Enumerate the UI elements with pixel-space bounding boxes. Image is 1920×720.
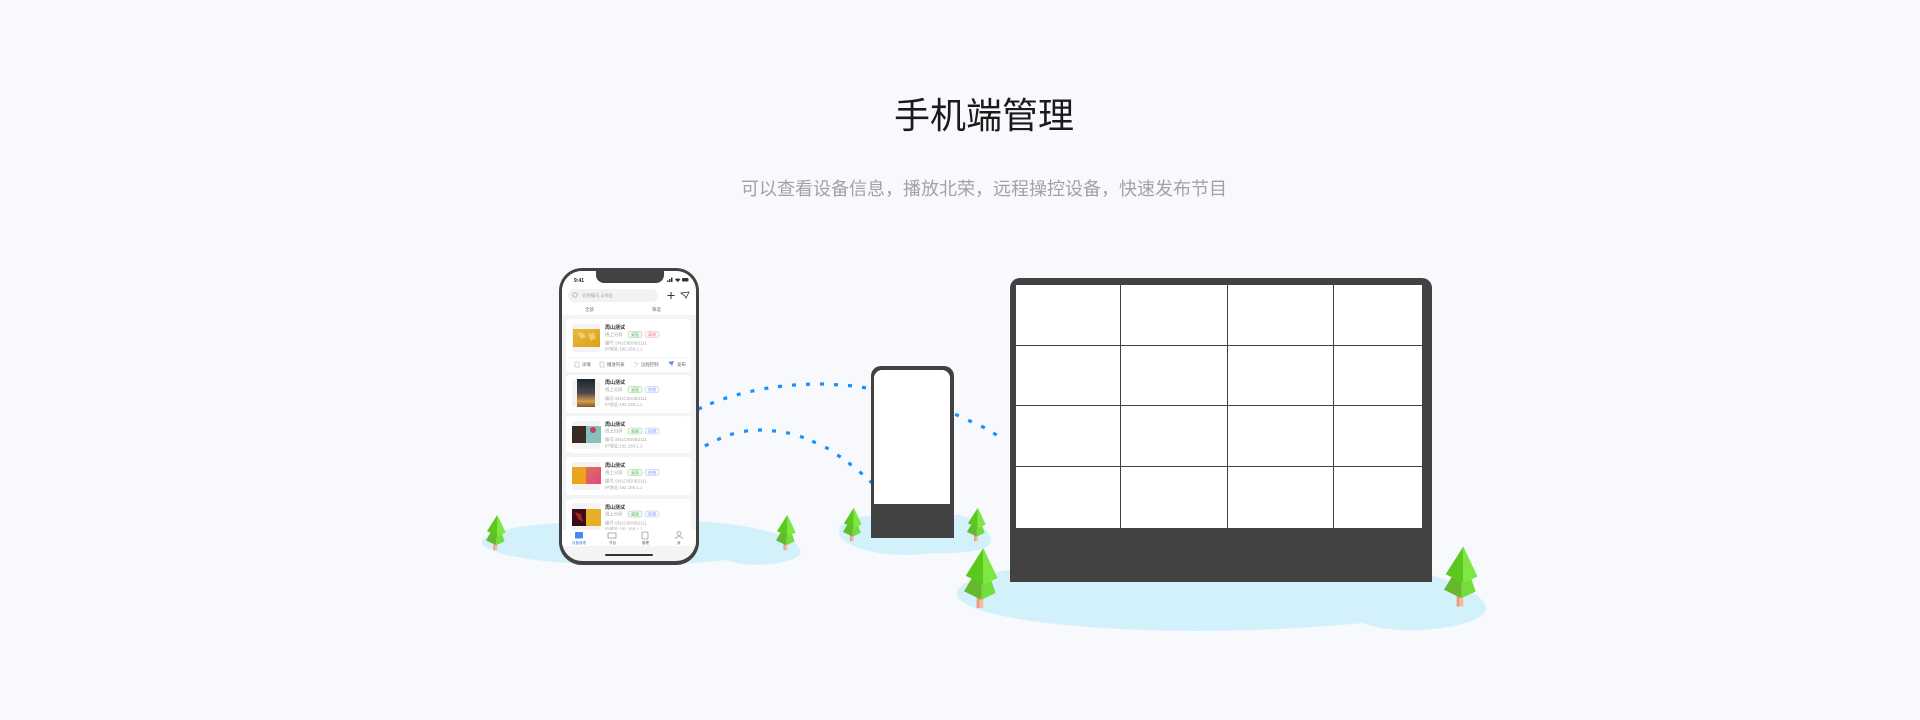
device card 1: 编号:SN1C0D0B2111 — [605, 340, 647, 346]
island: right — [957, 569, 1486, 631]
tree: right island left — [964, 548, 998, 608]
device card 4: IP地址:192.168.1.1 — [605, 484, 643, 490]
device card 1: 详情 — [582, 361, 591, 368]
dotted connection: phone to kiosk upper — [698, 384, 866, 409]
device card 5: 编号:SN1C0D0B2111 — [605, 520, 647, 526]
device card 3: 桌面 — [631, 428, 639, 434]
dotted connection: phone to kiosk lower — [705, 430, 872, 483]
dotted connection: kiosk to video wall — [955, 414, 997, 435]
illustration scene — [482, 268, 1486, 631]
device card 3 — [566, 416, 691, 453]
subtitle: 可以查看设备信息，播放北荣，远程操控设备，快速发布节目 — [741, 179, 1227, 199]
device card 4: 编号:SN1C0D0B2111 — [605, 478, 647, 484]
device card 4: 在线 — [648, 469, 656, 475]
device card 4: 线上分屏 — [605, 469, 623, 476]
tree: left island right — [776, 515, 796, 550]
kiosk device — [871, 366, 954, 538]
device card 4: 桌面 — [631, 469, 639, 475]
device card 3: 线上分屏 — [605, 428, 623, 434]
device card 5: 线上分屏 — [605, 510, 623, 518]
device card 2: IP地址:192.168.1.1 — [605, 401, 643, 407]
device card 3: 编号:SN1C0D0B2111 — [605, 436, 647, 443]
phone header: 全部 — [585, 306, 594, 313]
device card 3: 在线 — [648, 428, 656, 434]
phone header: 筛选 — [652, 306, 661, 313]
device card 5: 周山测试 — [605, 504, 625, 511]
tree: middle island right — [967, 508, 986, 541]
phone header — [562, 271, 696, 315]
device card 2: 周山测试 — [605, 379, 625, 386]
device card 4 — [566, 457, 691, 495]
phone device — [559, 268, 699, 565]
device card 2: 线上分屏 — [605, 386, 623, 393]
device card 1: 线上分屏 — [605, 331, 623, 338]
device card 1: 桌面 — [631, 331, 639, 337]
device card 3: 周山测试 — [605, 421, 625, 428]
device card 2: 编号:SN1C0D0B2111 — [605, 395, 647, 402]
device card 1: IP地址:192.168.1.1 — [605, 346, 643, 352]
home indicator — [605, 554, 653, 556]
device card 4: 周山测试 — [605, 462, 625, 469]
title: 手机端管理 — [894, 95, 1074, 136]
phone header: 名称编号 ip地址 — [582, 292, 614, 299]
phone tab bar — [562, 530, 696, 546]
phone tab bar: 我 — [677, 540, 681, 545]
phone notch — [596, 271, 664, 283]
island: middle — [839, 515, 991, 555]
device card 1: 远程控制 — [641, 361, 659, 368]
phone tab bar: 设备管理 — [572, 540, 586, 545]
tree: middle island left — [843, 508, 862, 541]
tree: left island left — [486, 515, 506, 550]
phone tab bar: 管理 — [642, 540, 650, 545]
device card 1: 周山测试 — [605, 324, 625, 331]
device card 5: 在线 — [648, 510, 656, 516]
device card 1: 播放列表 — [607, 361, 625, 368]
video wall device — [1010, 278, 1432, 582]
device card 5: IP地址:192.168.1.1 — [605, 526, 643, 532]
tree: right island right — [1444, 546, 1478, 606]
device card 1: 发布 — [677, 361, 686, 368]
device card 2 — [566, 375, 691, 413]
device card 5: 桌面 — [631, 510, 639, 516]
device card 5 — [566, 499, 691, 530]
device card 2: 在线 — [648, 386, 656, 392]
device card 1: 离线 — [648, 331, 656, 337]
phone header: 9:41 — [574, 278, 584, 284]
device card 1 — [566, 319, 691, 372]
device card 2: 桌面 — [631, 386, 639, 392]
device card 3: IP地址:192.168.1.1 — [605, 442, 643, 448]
island: left — [482, 521, 800, 565]
phone tab bar: 节目 — [609, 540, 616, 545]
